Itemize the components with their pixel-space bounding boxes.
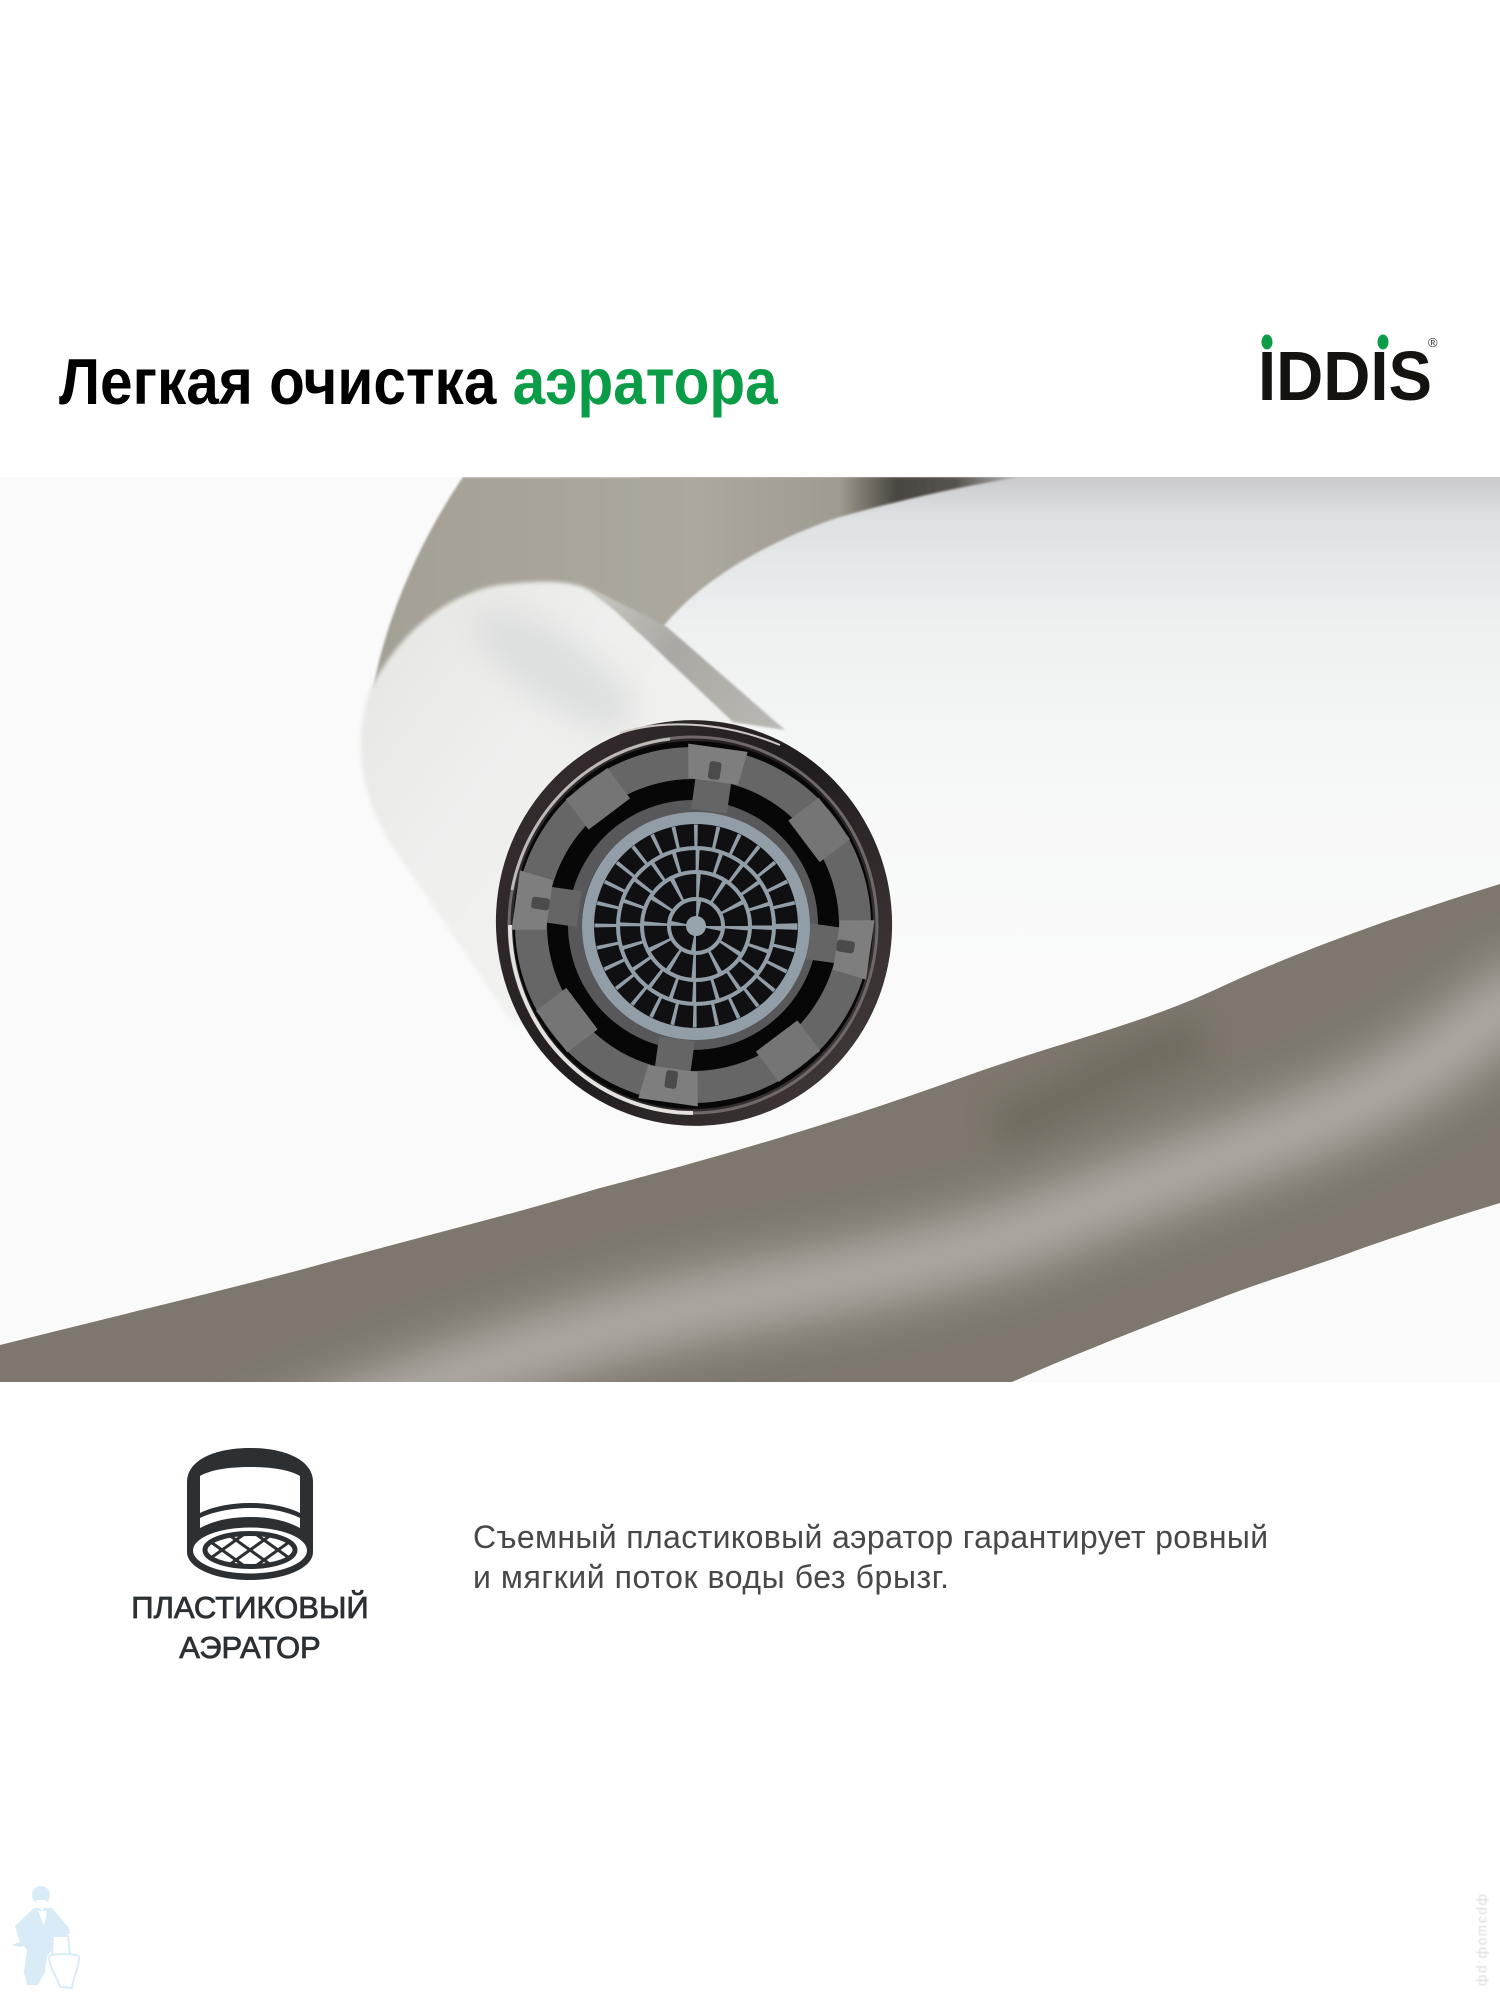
photo background <box>0 477 1500 1382</box>
aerator rim <box>470 694 918 1152</box>
logo: IDDIS: ® <box>1428 335 1438 350</box>
lower tube <box>0 884 1500 1382</box>
aerator plastic housing <box>491 723 895 1127</box>
upper tube <box>373 477 1020 690</box>
description text: и мягкий поток воды без брызг. <box>473 1559 950 1595</box>
icon label <box>131 1590 369 1665</box>
aerator mesh <box>582 812 810 1040</box>
photo: faucet spout with aerator <box>0 477 1500 1382</box>
watermark: vertical site label: фрэшоф.рф <box>1476 1894 1492 1988</box>
description text: Съемный пластиковый аэратор гарантирует ровный <box>473 1519 1268 1555</box>
title: Легкая очистка аэратора <box>59 345 778 418</box>
watermark: plumber with toilet <box>12 1886 80 1989</box>
icon: plastic aerator <box>187 1448 313 1580</box>
icon label: АЭРАТОР <box>179 1630 321 1665</box>
description text <box>473 1519 1268 1595</box>
silver spout body <box>361 582 850 1100</box>
grey backdrop top right <box>640 477 1500 997</box>
logo: IDDIS: IDDIS <box>1258 337 1432 415</box>
icon label: ПЛАСТИКОВЫЙ <box>131 1590 369 1625</box>
